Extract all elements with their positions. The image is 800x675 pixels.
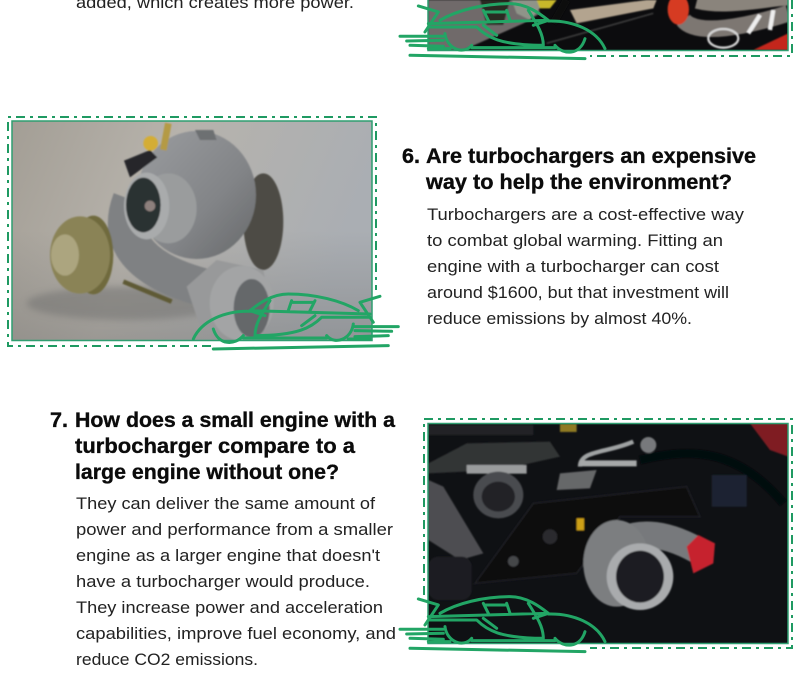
dashed frame [590, 0, 792, 56]
photo: engine bay with turbo [428, 423, 788, 643]
heading: question 6: way to help the environment? [425, 171, 732, 194]
heading: question 6: Are turbochargers an expensive [426, 145, 756, 168]
panel: dark engine bay photo with frame [400, 419, 792, 652]
heading: question 6 [402, 145, 756, 194]
heading: question 7: How does a small engine with a [75, 409, 395, 432]
icon: green sketched car [400, 4, 605, 59]
photo: grey turbocharger [12, 121, 372, 341]
photo border [12, 121, 372, 340]
body: answer 7: have a turbocharger would produce. [76, 572, 370, 591]
body: answer 7: power and performance from a smaller [76, 520, 393, 539]
body: answer 7: They increase power and acceleration [76, 598, 383, 617]
body: answer 7: capabilities, improve fuel economy, and [76, 624, 396, 643]
body: answer 6 [427, 205, 745, 328]
body: answer 6: engine with a turbocharger can cost [427, 257, 719, 276]
heading: question 6: 6. [402, 145, 420, 168]
heading: question 7 [50, 409, 395, 484]
photo: engine bay with exhaust manifold [428, 0, 788, 50]
heading: question 7: large engine without one? [75, 461, 339, 484]
heading: question 7: turbocharger compare to a [75, 435, 355, 458]
body: answer 6: around $1600, but that investment will [427, 283, 729, 302]
body: answer 6: Turbochargers are a cost-effective way [427, 205, 745, 224]
dashed frame [424, 419, 792, 648]
panel: top engine photo with frame [400, 0, 792, 59]
photo border [428, 424, 788, 644]
text block: question 7 [50, 409, 396, 669]
icon: green sketched car [193, 294, 398, 349]
body: answer 7: reduce CO2 emissions. [76, 650, 258, 669]
body: answer 6: to combat global warming. Fitting an [427, 231, 723, 250]
body: answer 7 [76, 494, 396, 669]
dashed frame [8, 117, 376, 346]
panel: turbocharger photo with frame [8, 117, 398, 349]
photo border [428, 0, 788, 50]
heading: question 7: 7. [50, 409, 68, 432]
body: answer 7: engine as a larger engine that doesn't [76, 546, 380, 565]
body: answer 6: reduce emissions by almost 40%. [427, 309, 692, 328]
text block: question 6 [402, 145, 756, 328]
icon: green sketched car [400, 597, 605, 652]
body: answer 7: They can deliver the same amount of [76, 494, 375, 513]
